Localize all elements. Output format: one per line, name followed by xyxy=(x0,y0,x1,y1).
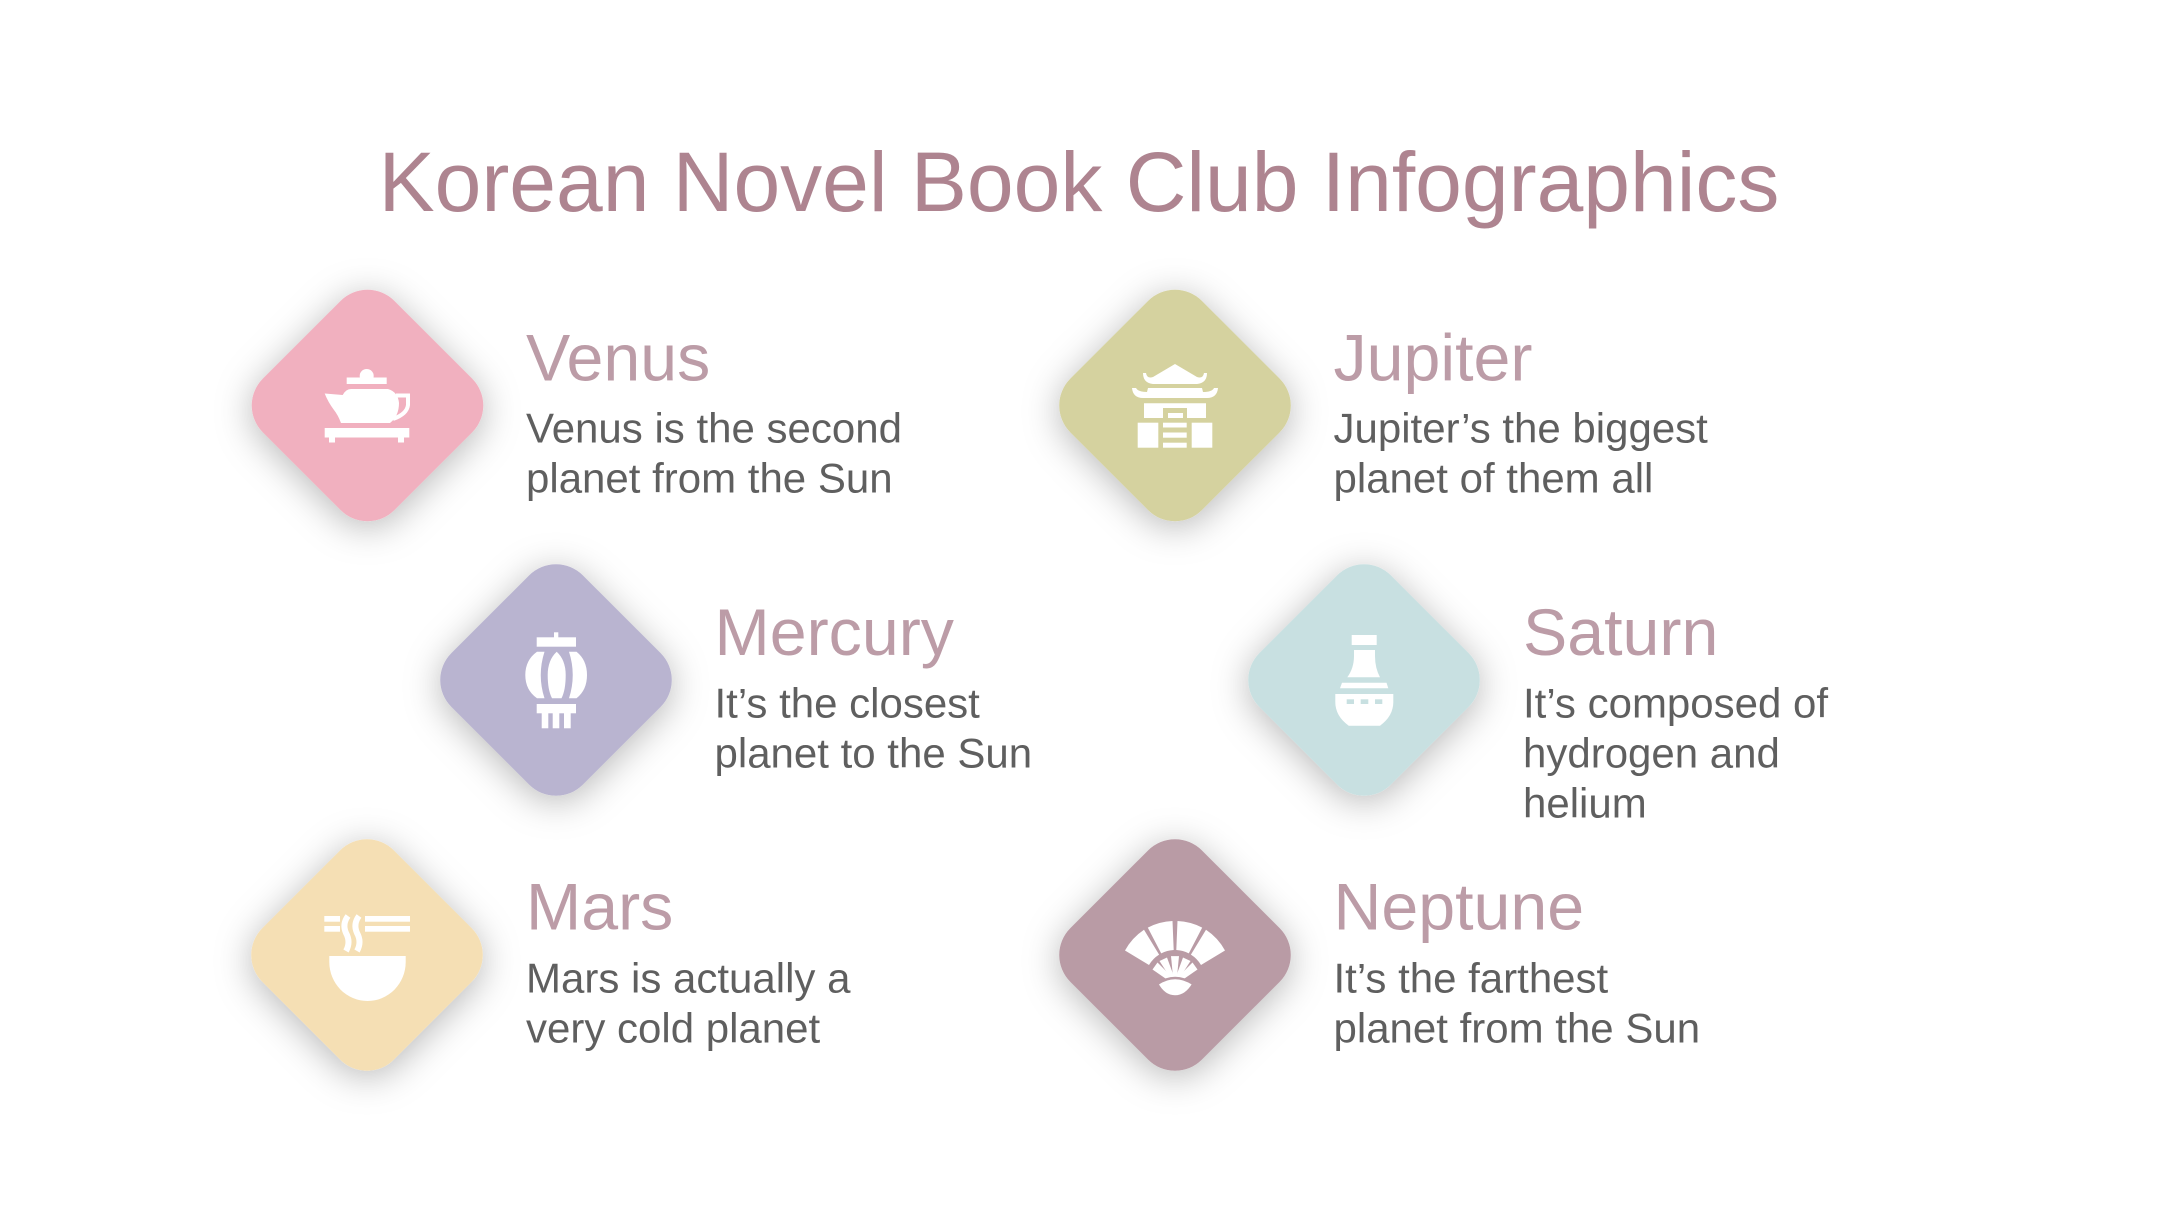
diamond: Saturn xyxy=(1232,548,1496,812)
icon: noodle bowl xyxy=(324,916,410,1001)
icon: pagoda xyxy=(1132,364,1218,448)
diamond: Mercury xyxy=(424,548,688,812)
description: Venus: planet from the Sun xyxy=(526,455,893,502)
icon: fan xyxy=(1125,921,1225,996)
description: Jupiter: planet of them all xyxy=(1334,455,1653,502)
icon: teapot xyxy=(325,369,409,442)
description: Mercury: It’s the closest xyxy=(714,680,980,727)
description: Venus: Venus is the second xyxy=(526,405,902,452)
heading: Saturn: Saturn xyxy=(1523,596,1718,670)
diamond: Venus xyxy=(236,274,499,537)
description: Neptune: planet from the Sun xyxy=(1334,1005,1700,1052)
heading: Mercury: Mercury xyxy=(714,596,955,670)
heading: Jupiter: Jupiter xyxy=(1334,322,1532,396)
description: Mars: very cold planet xyxy=(526,1005,820,1052)
description: Mercury: planet to the Sun xyxy=(714,730,1032,777)
title: Korean Novel Book Club Infographics xyxy=(379,135,1779,229)
panel: Jupiter xyxy=(1043,274,1708,537)
panel: Mercury xyxy=(424,548,1032,812)
panel: Venus xyxy=(236,274,902,537)
description: Saturn: helium xyxy=(1523,780,1647,827)
panel: Saturn xyxy=(1232,548,1828,827)
description: Saturn: hydrogen and xyxy=(1523,730,1780,777)
panel: Neptune xyxy=(1043,823,1700,1087)
heading: Neptune: Neptune xyxy=(1334,871,1584,945)
description: Mars: Mars is actually a xyxy=(526,955,851,1002)
description: Jupiter: Jupiter’s the biggest xyxy=(1334,405,1708,452)
description: Neptune: It’s the farthest xyxy=(1334,955,1609,1002)
description: Saturn: It’s composed of xyxy=(1523,680,1828,727)
icon: vase xyxy=(1335,635,1393,726)
diamond: Jupiter xyxy=(1043,274,1307,537)
heading: Mars: Mars xyxy=(526,871,673,945)
heading: Venus: Venus xyxy=(526,322,710,396)
panel: Mars xyxy=(235,823,851,1087)
icon: lantern xyxy=(525,632,587,728)
diamond: Mars xyxy=(235,823,499,1087)
diamond: Neptune xyxy=(1043,823,1307,1087)
